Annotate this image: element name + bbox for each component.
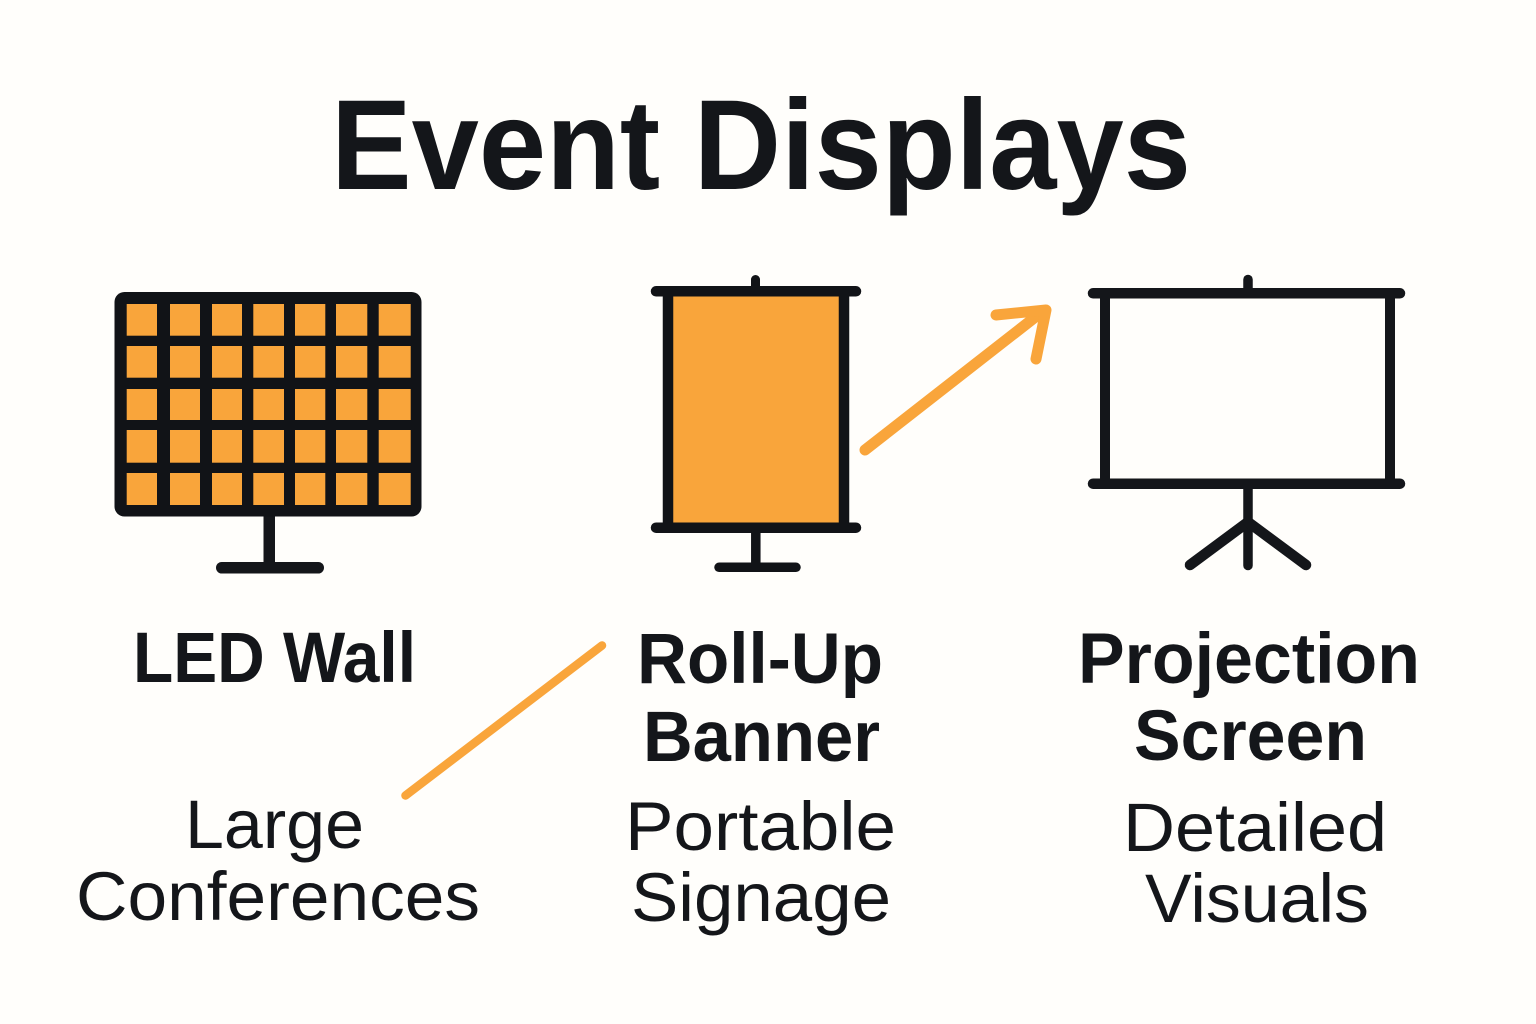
description: Large Conferences: Conferences: [76, 858, 480, 935]
heading: Roll-Up Banner: Roll-Up: [637, 620, 883, 699]
description: Portable Signage: [625, 788, 896, 936]
description: Portable Signage: Signage: [631, 859, 891, 936]
description: Portable Signage: Portable: [625, 788, 896, 865]
heading: Roll-Up Banner: Banner: [643, 698, 880, 777]
description: Detailed Visuals: [1123, 789, 1387, 937]
description: Detailed Visuals: Detailed: [1123, 789, 1387, 866]
heading: Projection Screen: Screen: [1134, 697, 1367, 776]
heading: Roll-Up Banner: [637, 620, 883, 777]
description: Large Conferences: Large: [185, 786, 364, 863]
connector line: Large Conferences to Roll-Up Banner: [406, 646, 602, 796]
icon: projection screen: [1093, 280, 1400, 566]
arrow: banner to projection screen: [865, 310, 1046, 450]
description: Large Conferences: [76, 786, 480, 935]
description: Detailed Visuals: Visuals: [1145, 860, 1369, 937]
icon: roll-up banner: [656, 280, 856, 567]
title: Event Displays: [331, 74, 1191, 217]
icon: LED wall: [114, 292, 422, 574]
heading: Projection Screen: Projection: [1078, 620, 1420, 699]
heading: Projection Screen: [1078, 620, 1420, 776]
heading: LED Wall: LED Wall: [133, 619, 416, 698]
